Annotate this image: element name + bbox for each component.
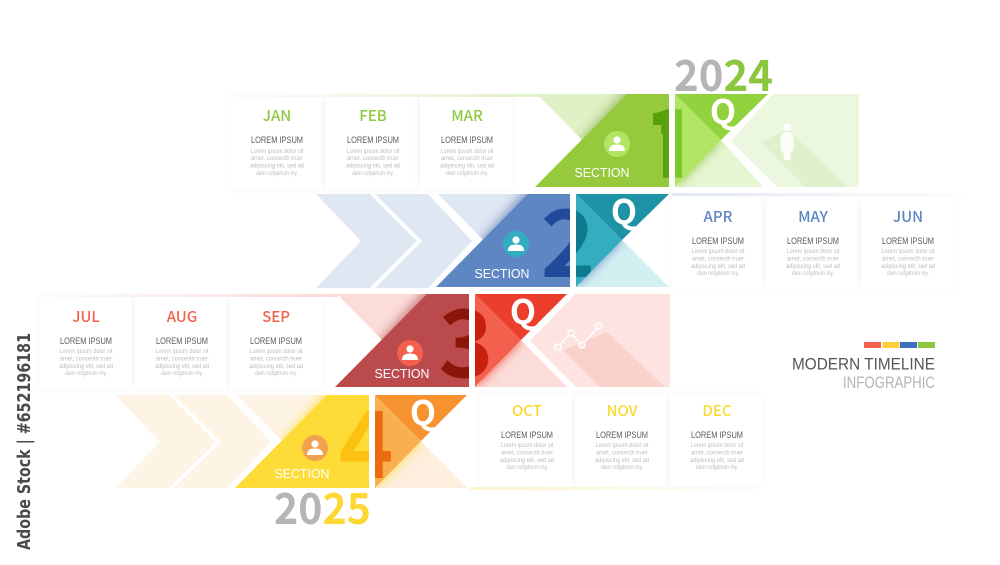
card: December: dam nofgdnum my. xyxy=(696,464,738,471)
row 3 month cards: third quarter xyxy=(40,294,338,389)
shadow under Q xyxy=(676,140,726,187)
lower light triangle xyxy=(375,441,467,488)
letter Q: Q xyxy=(410,386,436,435)
card: October: amet, consecth truer xyxy=(501,450,554,456)
number 2 on Q triangle: 2 xyxy=(541,169,595,304)
card: December: adipiscing elit, sed ad xyxy=(690,457,744,464)
card: January: dam nofgdnum my. xyxy=(256,170,298,177)
section label: SECTION xyxy=(474,266,530,281)
icon: line chart xyxy=(555,323,602,350)
card: January: LOREM IPSUM xyxy=(251,135,303,146)
card: May: Lorem ipsum dolor sit xyxy=(786,248,840,255)
Q left triangle xyxy=(375,395,421,488)
number 4 on Q triangle: 4 xyxy=(339,370,393,505)
shadow under Q xyxy=(576,240,625,287)
card: February: Lorem ipsum dolor sit xyxy=(346,148,400,155)
letter Q: Q xyxy=(611,185,637,234)
lower light triangle xyxy=(576,240,669,287)
light left triangle xyxy=(537,94,649,141)
number 1 on section: 1 xyxy=(630,70,709,204)
section block xyxy=(436,194,570,287)
card: November: amet, consecth truer xyxy=(596,450,649,456)
card: June: LOREM IPSUM xyxy=(882,236,934,247)
panel: quarter 2 arrow xyxy=(316,194,669,288)
card: March: MAR xyxy=(451,105,483,126)
card: December: Lorem ipsum dolor sit xyxy=(690,442,744,449)
card: April: amet, consecth truer xyxy=(692,256,745,262)
card: May: LOREM IPSUM xyxy=(787,236,839,247)
card: November: Lorem ipsum dolor sit xyxy=(596,442,649,449)
shadow under Q xyxy=(476,340,526,387)
heading: MODERN TIMELINE xyxy=(792,354,935,374)
chevron 2 xyxy=(375,194,472,288)
row 1 month cards: first quarter xyxy=(210,94,540,189)
shadow behind section xyxy=(577,94,627,140)
row 2 month cards: second quarter xyxy=(671,193,972,289)
Q top triangle xyxy=(375,395,467,441)
chevron 3 xyxy=(237,395,349,442)
card: May: amet, consecth truer xyxy=(787,256,840,262)
card: September: LOREM IPSUM xyxy=(250,336,302,347)
card: January: adipiscing elit, sed ad xyxy=(250,162,304,170)
card: February: FEB xyxy=(359,105,387,126)
card: November: LOREM IPSUM xyxy=(596,430,648,441)
card: March: amet, consecth truer xyxy=(441,155,494,162)
lower light triangle xyxy=(475,340,567,387)
card: July: adipiscing elit, sed ad xyxy=(59,363,113,370)
card: August: amet, consecth truer xyxy=(156,356,209,362)
year label 2024: 2024 xyxy=(674,42,773,104)
right light panel xyxy=(731,94,859,187)
card: March: adipiscing elit, sed ad xyxy=(440,162,494,170)
card: July: amet, consecth truer xyxy=(60,356,113,362)
card: January: JAN xyxy=(263,105,291,126)
letter Q: Q xyxy=(510,285,536,334)
icon: section person xyxy=(302,435,328,461)
card: October: OCT xyxy=(512,400,542,421)
Q top triangle xyxy=(576,194,669,240)
card: June xyxy=(861,197,953,289)
diagonal band xyxy=(761,129,848,187)
section label: SECTION xyxy=(274,466,330,481)
chevron 3 xyxy=(438,194,550,241)
chevron 1 xyxy=(316,194,417,288)
card: December: DEC xyxy=(702,400,732,421)
card: April: dam nofgdnum my. xyxy=(697,270,739,277)
lower light triangle xyxy=(675,140,763,187)
year label 2025: 2025 xyxy=(274,475,371,537)
panel: quarter 1 arrow xyxy=(535,94,859,187)
title block xyxy=(792,342,935,392)
shadow behind section xyxy=(478,194,528,240)
card: March: Lorem ipsum dolor sit xyxy=(440,148,494,155)
card: September: Lorem ipsum dolor sit xyxy=(250,348,303,355)
section block xyxy=(535,94,669,187)
card: January: amet, consecth truer xyxy=(251,155,304,162)
icon: section person xyxy=(503,231,529,257)
card: August: Lorem ipsum dolor sit xyxy=(156,348,209,355)
icon: section person xyxy=(397,340,423,366)
card: October: adipiscing elit, sed ad xyxy=(500,457,554,464)
card: April xyxy=(671,197,763,289)
diagonal band xyxy=(563,332,665,387)
section label: SECTION xyxy=(574,165,630,180)
card: October xyxy=(480,394,572,486)
card: January: Lorem ipsum dolor sit xyxy=(250,148,304,155)
card: May: adipiscing elit, sed ad xyxy=(786,263,840,270)
Q left triangle xyxy=(475,294,521,387)
shadow under Q xyxy=(376,441,426,488)
chevron 1 xyxy=(115,395,216,488)
card: July: Lorem ipsum dolor sit xyxy=(60,348,113,355)
colour bars xyxy=(864,342,935,348)
Q left triangle xyxy=(576,194,622,287)
shadow behind section xyxy=(377,294,427,340)
vertical stock image label: Adobe Stock | #652196181 xyxy=(14,333,35,550)
Q left triangle xyxy=(675,94,721,187)
card: August: AUG xyxy=(167,306,197,327)
card: August: adipiscing elit, sed ad xyxy=(155,363,209,370)
card: November: dam nofgdnum my. xyxy=(601,464,643,471)
icon: section person xyxy=(604,131,630,157)
card: October: LOREM IPSUM xyxy=(501,430,553,441)
card: August xyxy=(135,297,227,389)
card: June: Lorem ipsum dolor sit xyxy=(882,248,935,255)
card: September xyxy=(230,297,322,389)
card: December: amet, consecth truer xyxy=(691,450,744,456)
card: July: dam nofgdnum my. xyxy=(65,370,107,377)
Q top triangle xyxy=(475,294,567,340)
section label: SECTION xyxy=(374,366,430,381)
card: December xyxy=(670,394,762,486)
card: October: dam nofgdnum my. xyxy=(506,464,548,471)
subheading: INFOGRAPHIC xyxy=(843,374,935,392)
card: January xyxy=(231,97,322,189)
card: August: LOREM IPSUM xyxy=(156,336,208,347)
card: April: adipiscing elit, sed ad xyxy=(691,263,745,270)
right light panel xyxy=(530,294,670,387)
card: March xyxy=(420,97,512,189)
card: February: dam nofgdnum my. xyxy=(352,170,394,177)
letter Q: Q xyxy=(710,85,736,134)
card: March: LOREM IPSUM xyxy=(441,135,493,146)
card: November xyxy=(575,394,667,486)
row 4 month cards: fourth quarter xyxy=(470,394,762,490)
number 1 on Q triangle: 1 xyxy=(630,70,709,204)
card: November: NOV xyxy=(606,400,638,421)
section block xyxy=(335,294,469,387)
card: September: amet, consecth truer xyxy=(250,356,303,362)
card: April: LOREM IPSUM xyxy=(692,236,744,247)
card: June: dam nofgdnum my. xyxy=(887,270,929,277)
number 3 on Q triangle: 3 xyxy=(439,269,493,404)
chevron 2 xyxy=(174,395,271,488)
card: September: SEP xyxy=(262,306,290,327)
card: May: dam nofgdnum my. xyxy=(792,270,834,277)
card: May: MAY xyxy=(798,206,829,227)
card: November: adipiscing elit, sed ad xyxy=(595,457,649,464)
card: April: Lorem ipsum dolor sit xyxy=(692,248,745,255)
number 2 on section: 2 xyxy=(541,169,595,304)
card: April: APR xyxy=(704,206,733,227)
card: February: adipiscing elit, sed ad xyxy=(346,162,400,170)
card: March: dam nofgdnum my. xyxy=(446,170,488,177)
card: February: amet, consecth truer xyxy=(347,155,400,162)
card: August: dam nofgdnum my. xyxy=(161,370,203,377)
card: July: JUL xyxy=(72,306,100,327)
card: July: LOREM IPSUM xyxy=(60,336,112,347)
card: October: Lorem ipsum dolor sit xyxy=(500,442,554,449)
shadow behind section xyxy=(276,395,327,441)
icon: person silhouette xyxy=(780,123,794,160)
card: June: adipiscing elit, sed ad xyxy=(881,263,935,270)
light left triangle xyxy=(337,294,449,341)
card: February: LOREM IPSUM xyxy=(347,135,399,146)
card: June: amet, consecth truer xyxy=(882,256,935,262)
card: July xyxy=(40,297,132,389)
panel: quarter 4 arrow xyxy=(115,395,467,488)
card: September: adipiscing elit, sed ad xyxy=(249,363,303,370)
card: December: LOREM IPSUM xyxy=(691,430,743,441)
card: June: JUN xyxy=(893,206,923,227)
card: May xyxy=(766,197,858,289)
number 3 on section: 3 xyxy=(439,269,493,404)
card: September: dam nofgdnum my. xyxy=(255,370,297,377)
card: February xyxy=(325,97,417,189)
panel: quarter 3 arrow xyxy=(335,294,670,387)
section block xyxy=(235,395,369,488)
number 4 on section: 4 xyxy=(339,370,393,505)
Q top triangle xyxy=(675,94,768,140)
